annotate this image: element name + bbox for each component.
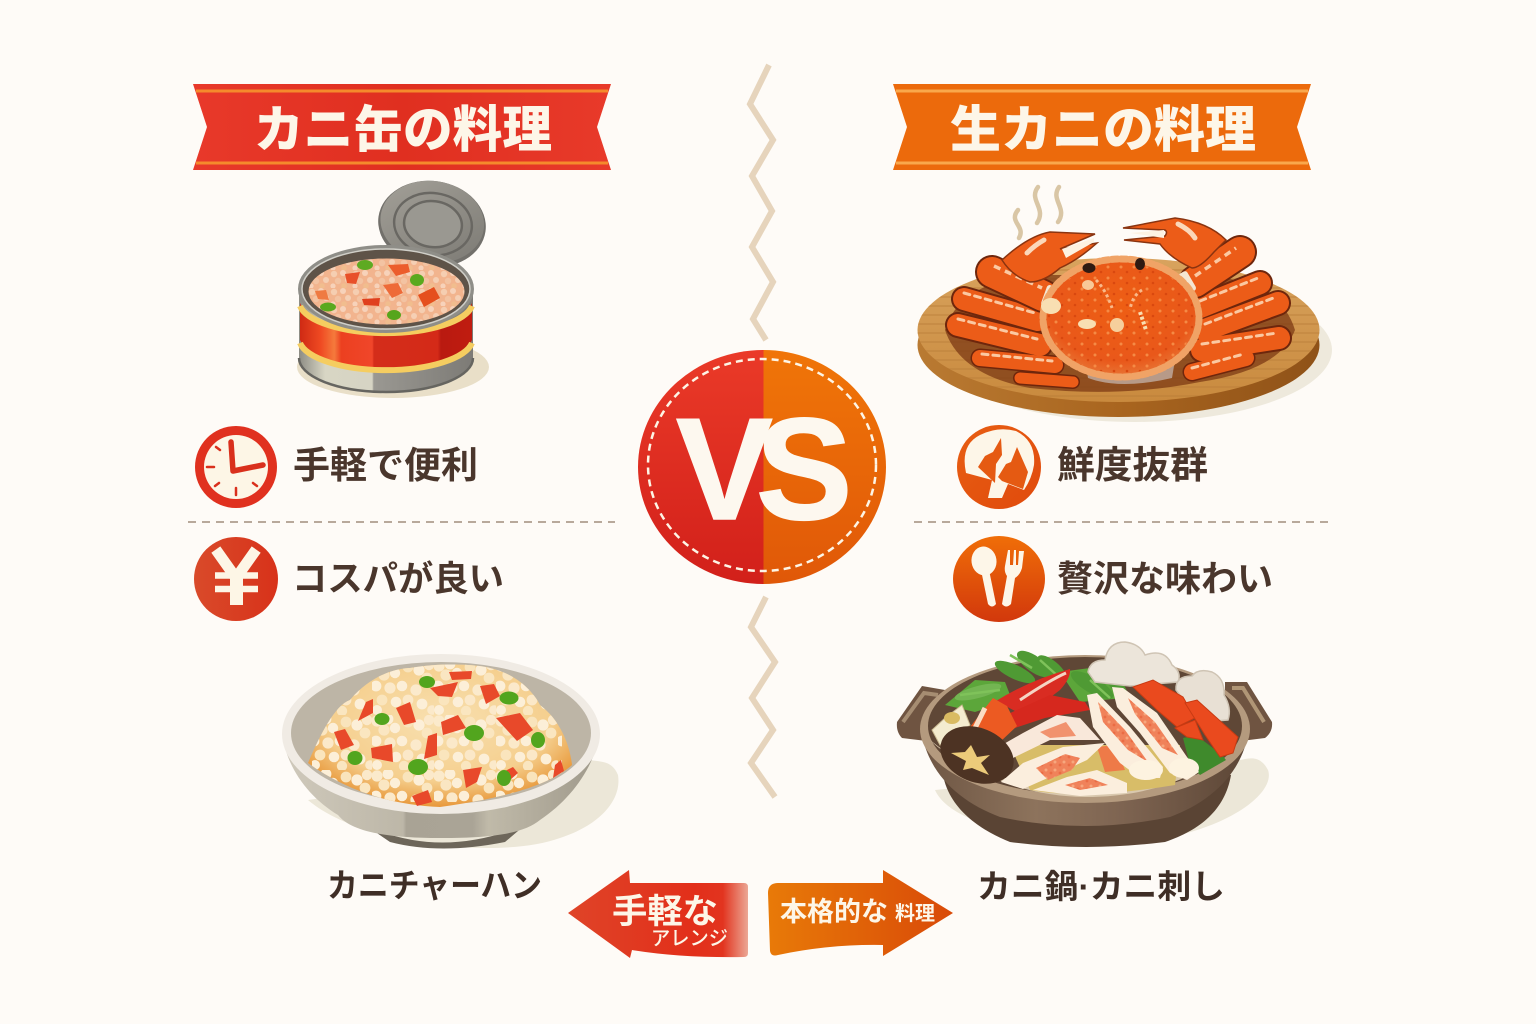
crab legs bbox=[958, 278, 1279, 382]
orange crab pieces bbox=[1133, 680, 1238, 757]
heading: canned crab dishes: カニ缶の料理 bbox=[254, 102, 552, 158]
illustration: crab hot pot bbox=[897, 642, 1272, 847]
icon: crab claw bbox=[957, 425, 1041, 509]
arrow text: easy: 手軽な bbox=[612, 893, 718, 931]
label: crab hot pot and sashimi: カニ鍋·カニ刺し bbox=[977, 868, 1225, 905]
icon: spoon and fork bbox=[953, 536, 1045, 622]
arrow text: cuisine: 料理 bbox=[895, 902, 935, 925]
steam clouds / tofu bbox=[1088, 642, 1229, 722]
arrow: easy arrange bbox=[568, 870, 748, 958]
feature: outstanding freshness bbox=[957, 425, 1208, 509]
feature: good value bbox=[194, 537, 504, 621]
illustration: open crab can bbox=[297, 174, 491, 398]
red crab claw bbox=[970, 669, 1090, 742]
icon: yen coin bbox=[194, 537, 278, 621]
center zigzag divider: bottom bbox=[751, 597, 775, 797]
center zigzag divider: top bbox=[750, 65, 773, 340]
crab meat pieces bbox=[1001, 687, 1199, 796]
label: outstanding freshness: 鮮度抜群 bbox=[1057, 444, 1208, 486]
divider line: right bbox=[914, 521, 1332, 523]
label: crab fried rice: カニチャーハン bbox=[327, 867, 542, 904]
rice toppings: crab and peas bbox=[334, 671, 564, 806]
divider line: left bbox=[188, 521, 615, 523]
arrow text: authentic: 本格的な bbox=[780, 897, 888, 927]
vegetables bbox=[945, 646, 1226, 775]
label: good value: コスパが良い bbox=[292, 560, 504, 599]
label: convenient: 手軽で便利 bbox=[293, 445, 478, 486]
label: luxurious taste: 贅沢な味わい bbox=[1057, 558, 1273, 599]
icon: clock bbox=[195, 426, 277, 508]
crab arms and claws bbox=[992, 218, 1240, 310]
banner: canned crab dishes bbox=[193, 84, 611, 170]
shiitake mushroom bbox=[932, 716, 1022, 794]
crab shell bbox=[1041, 258, 1199, 384]
steam bbox=[1015, 187, 1061, 238]
arrow text: arrange: アレンジ bbox=[651, 928, 728, 950]
arrow: authentic cuisine bbox=[768, 870, 953, 956]
feature: luxurious taste bbox=[953, 536, 1273, 622]
pot handles bbox=[897, 682, 1272, 743]
can lid bbox=[373, 174, 491, 274]
heading: fresh crab dishes: 生カニの料理 bbox=[950, 102, 1256, 158]
illustration: crab fried rice bbox=[282, 654, 618, 848]
VS text: VS bbox=[676, 388, 848, 550]
VS badge bbox=[638, 350, 886, 584]
banner: fresh crab dishes bbox=[893, 84, 1311, 170]
feature: convenient bbox=[195, 426, 478, 508]
boiled egg star bbox=[932, 705, 970, 745]
illustration: boiled crab on wooden plate bbox=[910, 187, 1332, 422]
